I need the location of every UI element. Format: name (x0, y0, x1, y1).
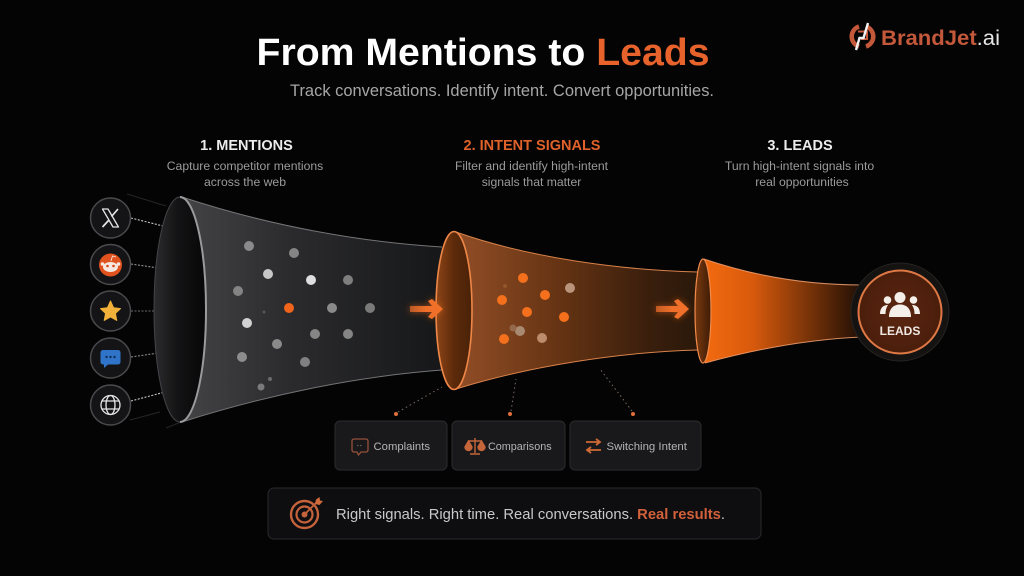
funnel 1: mentions (154, 197, 442, 422)
funnel 2: intent signals (436, 232, 698, 390)
subtitle: Track conversations. Identify intent. Convert opportunities. (290, 82, 714, 100)
chip: switching intent: Switching Intent (606, 441, 688, 453)
icon: Reddit source (90, 244, 130, 284)
mention dots (233, 241, 375, 390)
banner (268, 488, 761, 539)
step 2 heading and text: Filter and identify high-intent (455, 159, 609, 173)
arrow: mentions to intent (410, 299, 443, 319)
icon: X source (90, 198, 130, 238)
source connector lines (131, 218, 190, 401)
leads circle (851, 263, 949, 361)
step 1 heading and text (167, 138, 323, 189)
step 1 heading and text: 1. MENTIONS (200, 138, 293, 154)
step 3 heading and text (725, 138, 874, 189)
title: From Mentions to Leads (256, 32, 710, 74)
intent dots (497, 273, 575, 344)
icon: scales (465, 438, 485, 454)
chip: complaints: Complaints (374, 441, 430, 453)
step 2 heading and text: signals that matter (482, 175, 581, 189)
leads label: LEADS (880, 324, 920, 338)
chip: switching intent (570, 421, 701, 470)
icon: star reviews source (90, 291, 130, 331)
logo: BrandJet.ai (852, 23, 1000, 50)
signal connector dots (394, 412, 635, 416)
icon: people (880, 292, 920, 317)
chip: comparisons: Comparisons (488, 441, 552, 453)
funnel 3: leads (695, 259, 862, 363)
step 2 heading and text (455, 138, 609, 189)
banner text: Right signals. Right time. Real conversations. Real results. (336, 506, 725, 523)
step 3 heading and text: 3. LEADS (767, 138, 833, 154)
chip: comparisons (452, 421, 565, 470)
logo wordmark: BrandJet.ai (881, 27, 1000, 50)
icon: swap arrows (586, 439, 601, 453)
icon: logo mark (852, 23, 873, 50)
icon: comment (352, 439, 368, 455)
icon: forum chat source (90, 338, 130, 378)
arrow: intent to leads (656, 299, 689, 319)
signal connector lines (398, 369, 632, 412)
step 1 heading and text: across the web (204, 175, 286, 189)
step 2 heading and text: 2. INTENT SIGNALS (464, 138, 601, 154)
step 3 heading and text: Turn high-intent signals into (725, 159, 874, 173)
step 1 heading and text: Capture competitor mentions (167, 159, 323, 173)
chip: complaints (335, 421, 447, 470)
step 3 heading and text: real opportunities (755, 175, 849, 189)
icon: web globe source (90, 385, 130, 425)
icon: target (291, 497, 323, 528)
